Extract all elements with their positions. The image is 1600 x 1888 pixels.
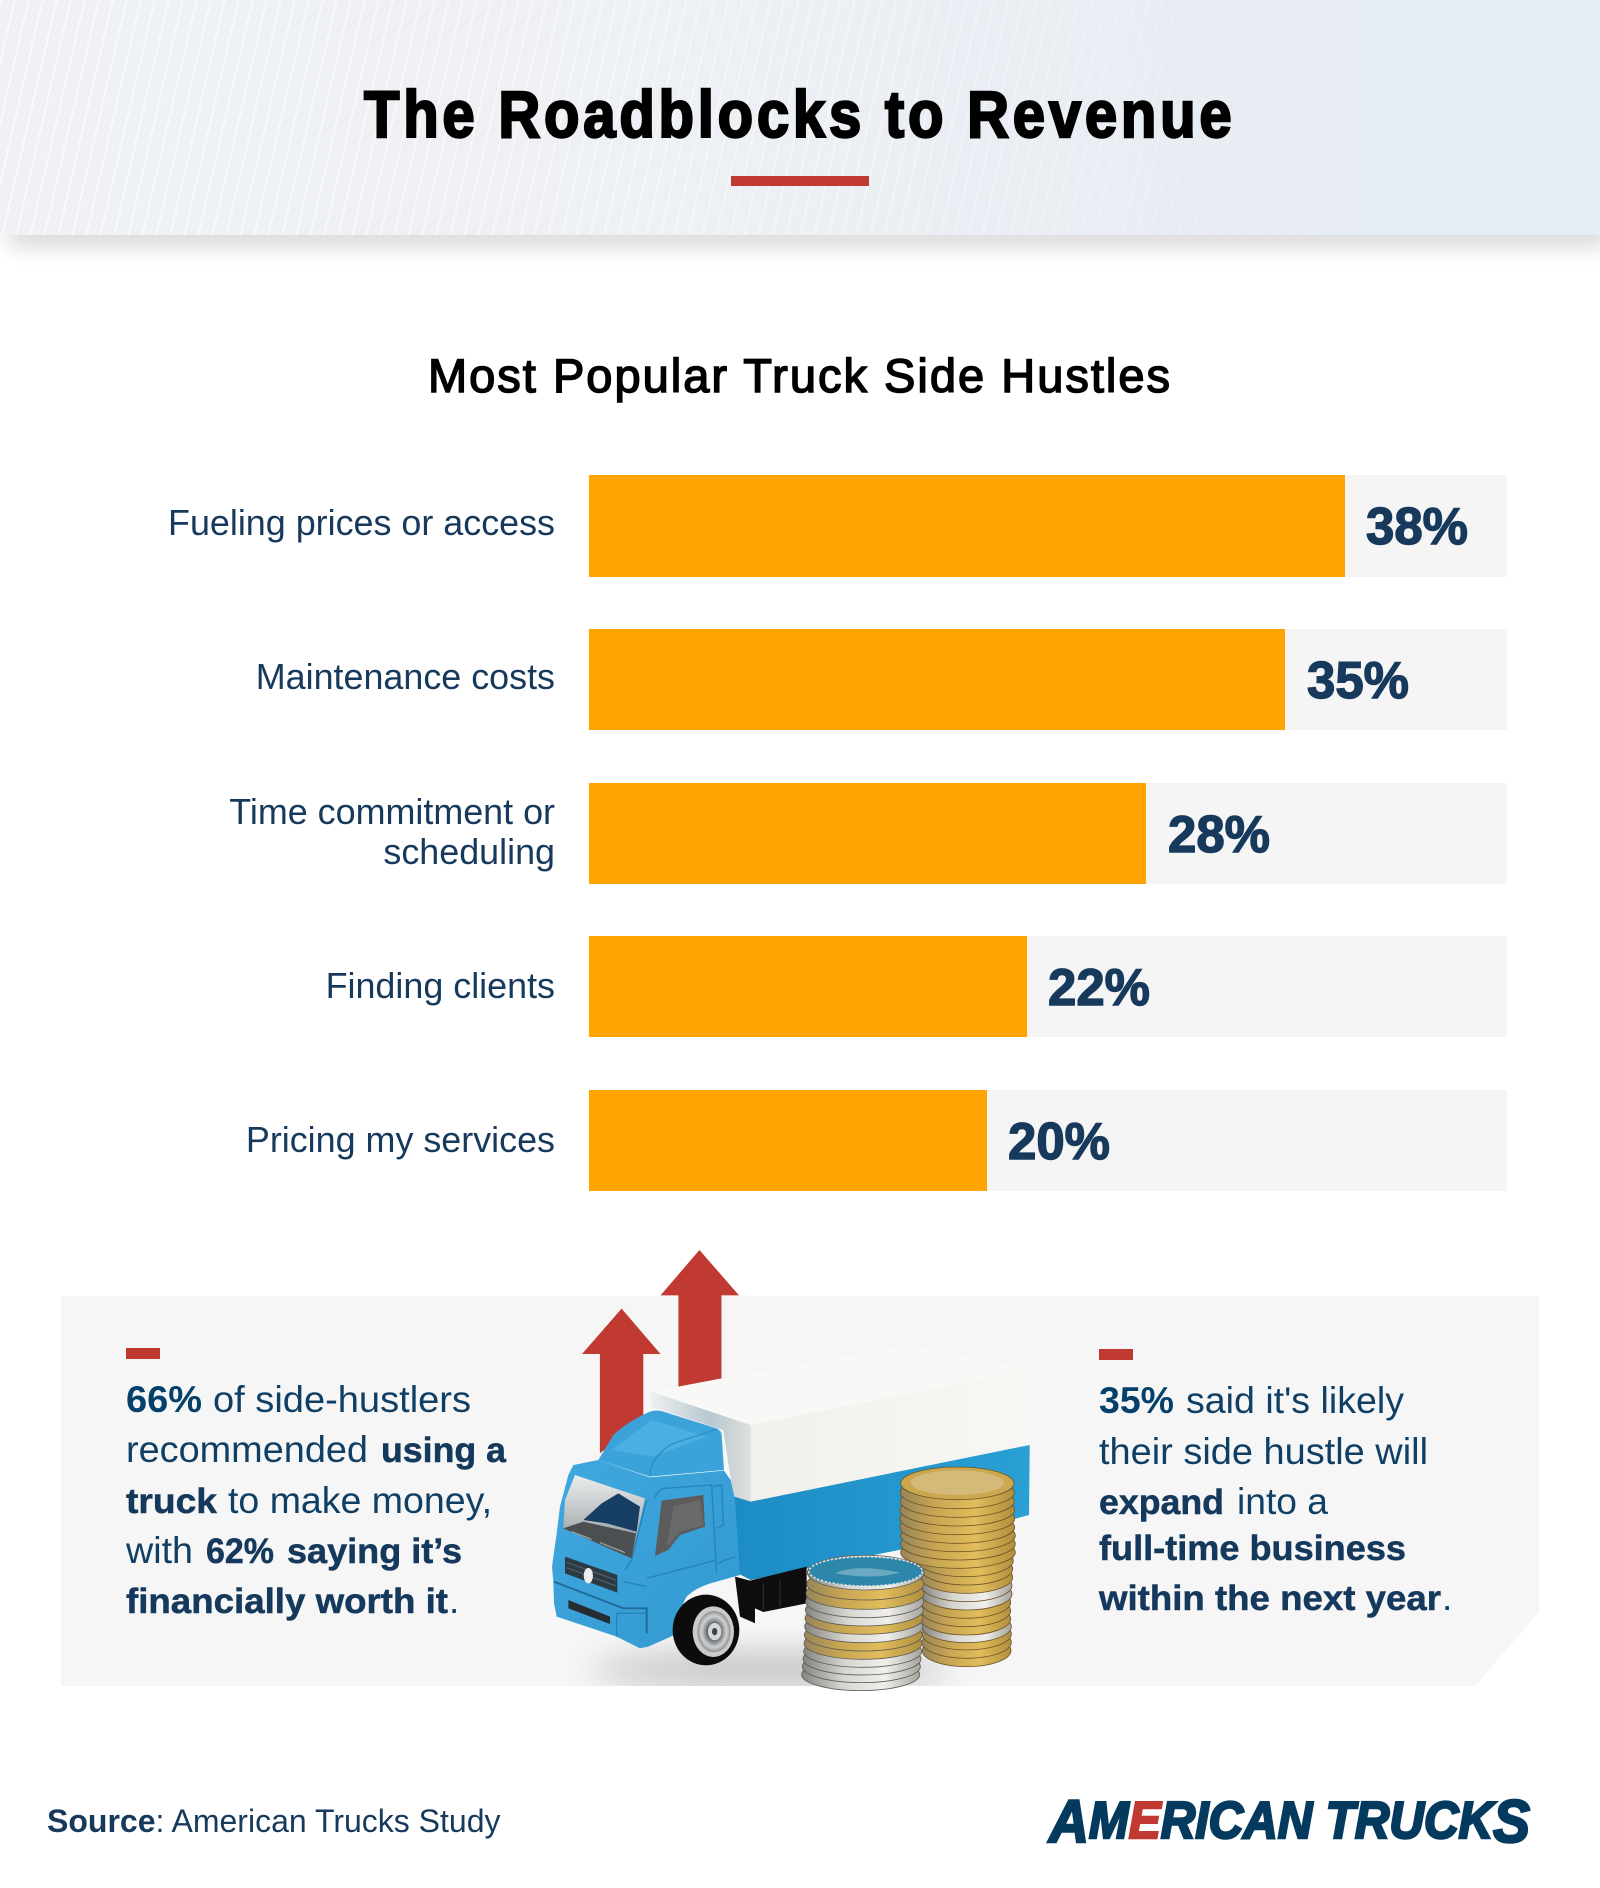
bar: maintenance costs: 35% bbox=[1307, 652, 1409, 710]
bar: finding clients: Finding clients bbox=[326, 966, 555, 1006]
callout: right: into a bbox=[1237, 1481, 1328, 1522]
headlight bbox=[584, 1568, 593, 1583]
deflector bbox=[598, 1410, 724, 1477]
callout: right: their side hustle will bbox=[1099, 1431, 1428, 1472]
callout: right bbox=[1098, 1349, 1452, 1618]
title underline bbox=[731, 176, 869, 186]
callout: left: of side-hustlers bbox=[213, 1379, 471, 1420]
coin stack: front bbox=[802, 1555, 924, 1691]
callout: left bbox=[125, 1348, 507, 1621]
logo: American Trucks: ERICAN TRUCK bbox=[1129, 1792, 1522, 1850]
cab body bbox=[552, 1460, 740, 1648]
panel: callouts background bbox=[61, 1296, 1539, 1686]
bar: time commitment bbox=[229, 783, 1507, 884]
callout: left: recommended bbox=[126, 1429, 368, 1470]
logo: American Trucks: M bbox=[1089, 1792, 1130, 1850]
bar: finding clients: 22% bbox=[1048, 959, 1150, 1017]
callout: left: 62% bbox=[206, 1532, 274, 1571]
illustration: truck, coins and arrows bbox=[552, 1250, 1031, 1691]
bar: time commitment: Time commitment or bbox=[229, 792, 555, 832]
wheel bbox=[673, 1595, 739, 1665]
windshield bbox=[563, 1475, 645, 1558]
callout: left: to make money, bbox=[228, 1480, 492, 1521]
bar: maintenance costs bbox=[256, 629, 1507, 730]
callout: right: full-time business bbox=[1099, 1529, 1406, 1568]
header band bbox=[0, 0, 1600, 246]
front grille bbox=[565, 1557, 617, 1593]
ground shadow bbox=[590, 1652, 950, 1688]
bar: pricing services: 20% bbox=[1008, 1113, 1110, 1171]
coin stack: back bbox=[900, 1467, 1015, 1667]
callout: left: with bbox=[125, 1530, 193, 1571]
bar: pricing services: Pricing my services bbox=[246, 1120, 555, 1160]
source note: Source: American Trucks Study bbox=[47, 1803, 500, 1839]
title: The Roadblocks to Revenue bbox=[364, 79, 1232, 152]
bumper bbox=[554, 1582, 647, 1633]
bar: fueling prices: 38% bbox=[1366, 498, 1468, 556]
logo: American Trucks: S bbox=[1493, 1788, 1530, 1855]
callout: left: 66% bbox=[126, 1379, 202, 1420]
bar: time commitment: 28% bbox=[1168, 806, 1270, 864]
callout: left: . bbox=[449, 1580, 459, 1621]
callout: left: saying it’s bbox=[287, 1532, 462, 1571]
icon: red up arrows bbox=[582, 1250, 739, 1453]
chassis bbox=[735, 1567, 807, 1623]
callout: left: truck bbox=[126, 1482, 218, 1521]
logo: American Trucks: A bbox=[1047, 1788, 1089, 1855]
callout: right: expand bbox=[1099, 1483, 1224, 1522]
chart heading: Most Popular Truck Side Hustles bbox=[428, 349, 1170, 402]
truck cab bbox=[552, 1410, 807, 1665]
bar chart bbox=[168, 475, 1507, 1191]
bar: pricing services bbox=[246, 1090, 1507, 1191]
bar: maintenance costs: Maintenance costs bbox=[256, 657, 555, 697]
side window bbox=[655, 1495, 705, 1556]
bar: fueling prices bbox=[168, 475, 1507, 577]
callout: right: said it's likely bbox=[1186, 1380, 1404, 1421]
bar: fueling prices: Fueling prices or access bbox=[168, 503, 555, 543]
bar: finding clients bbox=[326, 936, 1507, 1037]
truck cargo box bbox=[651, 1345, 1031, 1580]
bar: time commitment: scheduling bbox=[383, 832, 555, 872]
callout: right: 35% bbox=[1099, 1380, 1174, 1421]
callout: right: within the next year bbox=[1098, 1579, 1441, 1618]
callout: right: . bbox=[1442, 1577, 1452, 1618]
door lines bbox=[647, 1485, 735, 1578]
callout: left: financially worth it bbox=[126, 1582, 448, 1621]
callout: left: using a bbox=[381, 1431, 507, 1470]
